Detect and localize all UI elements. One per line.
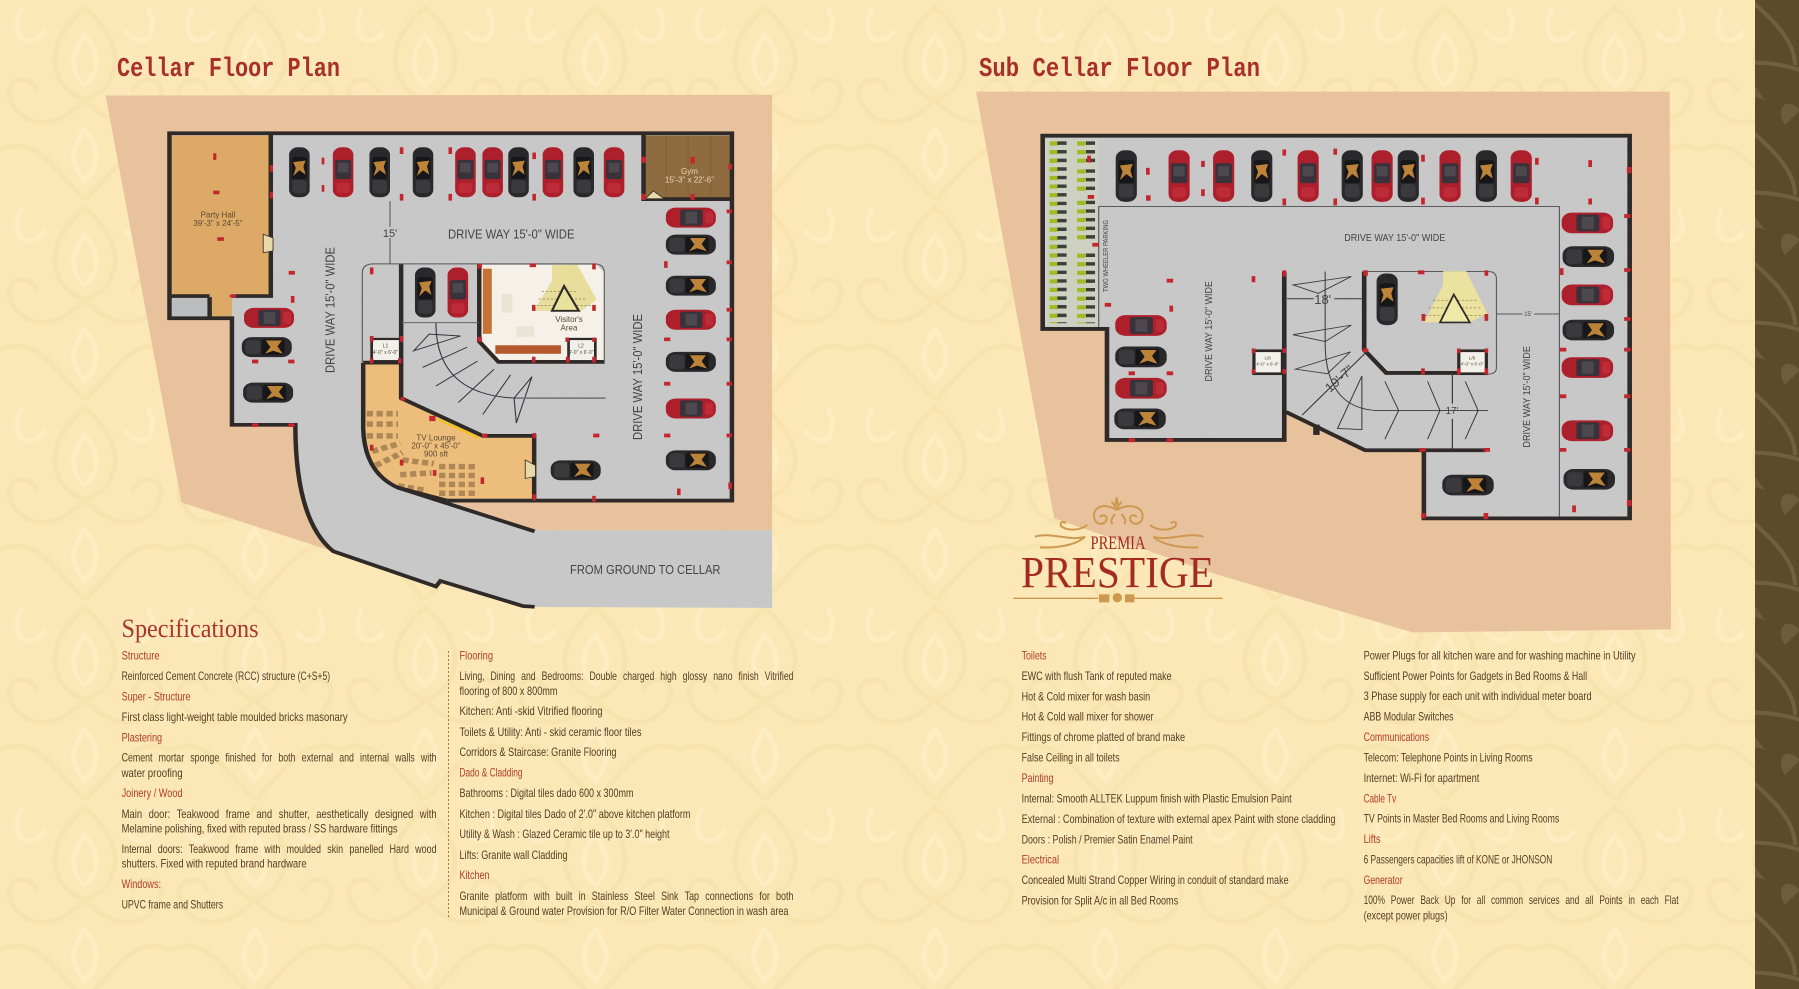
label: drive way top: DRIVE WAY 15'-0" WIDE xyxy=(448,226,575,242)
text block: specifications column 3: Painting xyxy=(1022,771,1054,785)
parking floor xyxy=(1043,136,1630,518)
text block: specifications column 4: Cable Tv xyxy=(1364,791,1396,805)
label: lift left: 4'-0" x 6'-0" xyxy=(1256,362,1279,366)
label: drive way left: DRIVE WAY 15'-0" WIDE xyxy=(322,247,338,373)
label: lift 2: L2 xyxy=(578,344,584,350)
text block: specifications column 1: Super - Structure xyxy=(122,690,191,704)
title: Sub Cellar Floor Plan: Sub Cellar Floor Plan xyxy=(979,55,1260,85)
red pillars xyxy=(1087,149,1631,519)
lift boxes xyxy=(1254,351,1486,374)
dimension 15 ft line xyxy=(389,201,391,264)
text block: specifications column 1: Cement mortar sponge finished for both external and internal walls with xyxy=(122,750,437,764)
text block: specifications column 2: Kitchen xyxy=(460,868,490,882)
text block: specifications column 2: Lifts: Granite wall Cladding xyxy=(460,848,568,862)
text block: specifications column 1: Joinery / Wood xyxy=(122,786,183,800)
label: ramp: FROM GROUND TO CELLAR xyxy=(570,562,720,577)
text block: specifications column 4: Sufficient Power Points for Gadgets in Bed Rooms & Hall xyxy=(1364,669,1587,683)
visitor furniture xyxy=(483,269,561,354)
label: lift 2: 4'-0" x 6'-0" xyxy=(568,350,594,356)
text block: specifications column 4: Power Plugs for all kitchen ware and for washing machine in Utility xyxy=(1364,648,1636,662)
text block: specifications column 3: Internal: Smooth ALLTEK Luppum finish with Plastic Emulsion Paint xyxy=(1022,791,1292,805)
text block: specifications column 3 xyxy=(1022,648,1336,907)
text block: specifications column 3: Toilets xyxy=(1022,648,1047,662)
text block: specifications column 4: Communications xyxy=(1364,730,1429,744)
dimension: 18 ft: 18' xyxy=(1314,292,1331,307)
label: visitor's area: Visitor's xyxy=(555,315,583,324)
logo word: Premia: PREMIA xyxy=(1090,533,1146,554)
label: drive way top: DRIVE WAY 15'-0" WIDE xyxy=(1344,232,1445,244)
site boundary xyxy=(976,92,1671,632)
label: 15 ft: 15' xyxy=(383,228,397,240)
text block: specifications column 4: Telecom: Telephone Points in Living Rooms xyxy=(1364,750,1533,764)
label: party hall: Party Hall xyxy=(201,210,235,220)
text block: specifications column 4: Internet: Wi-Fi for apartment xyxy=(1364,771,1480,785)
text block: specifications column 2: Municipal & Ground water Provision for R/O Filter Water Connection in wash area xyxy=(460,904,789,918)
text block: specifications column 2: flooring of 800 x 800mm xyxy=(460,684,558,698)
staircase xyxy=(1424,271,1487,322)
heading: Specifications: Specifications xyxy=(122,614,258,643)
sub cellar plan geometry xyxy=(976,92,1671,632)
text block: specifications column 1: Internal doors: Teakwood frame with moulded skin panelled Hard wood xyxy=(122,842,437,856)
ramp guide lines xyxy=(414,323,606,423)
text block: specifications column 4: Generator xyxy=(1364,873,1403,887)
text block: specifications column 1: Structure xyxy=(122,648,160,662)
label: drive way right: DRIVE WAY 15'-0" WIDE xyxy=(1521,346,1533,448)
site boundary xyxy=(106,95,772,551)
walls xyxy=(1043,136,1630,518)
party hall room xyxy=(171,135,271,317)
text block: specifications column 1: Windows: xyxy=(122,877,161,891)
logo ornament xyxy=(1013,497,1223,601)
text block: specifications column 3: EWC with flush Tank of reputed make xyxy=(1022,669,1172,683)
title: Cellar Floor Plan: Cellar Floor Plan xyxy=(117,55,340,85)
text block: specifications column 4 xyxy=(1364,648,1679,922)
text block: specifications column 2: Kitchen : Digital tiles Dado of 2'.0" above kitchen platform xyxy=(460,807,690,821)
side band: brown damask strip xyxy=(1755,0,1799,989)
text block: specifications column 3: External : Combination of texture with external apex Paint with stone cladding xyxy=(1022,812,1336,826)
label: lift 1: 4'-0" x 6'-0" xyxy=(373,350,398,356)
label: drive way right: DRIVE WAY 15'-0" WIDE xyxy=(630,314,645,440)
dimension: 17 ft: 17' xyxy=(1445,406,1459,417)
thin block outline xyxy=(362,264,604,364)
panel: sub cellar floor plan xyxy=(976,92,1671,632)
text block: specifications column 1: First class light-weight table moulded bricks masonary xyxy=(122,710,348,724)
label: tv lounge: 900 sft xyxy=(424,450,449,458)
text block: specifications column 4: 3 Phase supply for each unit with individual meter board xyxy=(1364,689,1592,703)
text block: specifications column 4: Lifts xyxy=(1364,832,1381,846)
label: lift 1: L1 xyxy=(383,344,388,350)
text block: specifications column 3: Concealed Multi Strand Copper Wiring in conduit of standard make xyxy=(1022,873,1289,887)
tv lounge room xyxy=(365,364,534,499)
label: lift left: L/8 xyxy=(1264,356,1271,360)
parked cars xyxy=(242,147,716,480)
label: lift right: 4'-0" x 6'-0" xyxy=(1461,362,1484,366)
text block: specifications column 4: ABB Modular Switches xyxy=(1364,709,1454,723)
text block: specifications column 3: Hot & Cold mixer for wash basin xyxy=(1022,689,1150,703)
text block: specifications column 3: Fittings of chrome platted of brand make xyxy=(1022,730,1185,744)
text block: specifications column 1 xyxy=(121,648,437,912)
thin driveway outline xyxy=(1099,206,1559,516)
store room xyxy=(171,297,209,316)
text block: specifications column 1: Reinforced Cement Concrete (RCC) structure (C+S+5) xyxy=(122,669,330,683)
yellow glass line xyxy=(438,419,478,438)
text block: specifications column 2 xyxy=(460,648,794,918)
text block: specifications column 1: Melamine polishing, fixed with reputed brass / SS hardware fittings xyxy=(122,822,398,836)
text block: specifications column 1: UPVC frame and Shutters xyxy=(122,898,223,912)
text block: specifications column 1: Plastering xyxy=(122,730,162,744)
lift boxes xyxy=(372,339,595,361)
visitor's area room xyxy=(481,265,604,361)
text block: specifications column 3: False Ceiling in all toilets xyxy=(1022,750,1120,764)
label: drive way left: DRIVE WAY 15'-0" WIDE xyxy=(1203,281,1215,382)
lounge seating xyxy=(367,414,477,493)
label: tv lounge: 20'-0" x 45'-0" xyxy=(411,442,461,450)
ramp guide lines xyxy=(1287,272,1488,449)
label: gym: 15'-3" x 22'-6" xyxy=(665,176,714,184)
walls xyxy=(169,133,732,607)
label: visitor's area: Area xyxy=(561,324,578,332)
logo word: Prestige: PRESTIGE xyxy=(1021,548,1214,597)
door swings xyxy=(263,191,664,478)
cellar plan geometry xyxy=(106,95,772,608)
text block: specifications column 3: Hot & Cold wall mixer for shower xyxy=(1022,709,1154,723)
two wheeler bays xyxy=(1045,139,1099,326)
text block: specifications column 1: Main door: Teakwood frame and shutter, aesthetically designed with xyxy=(122,807,437,821)
text block: specifications column 2: Granite platform with built in Stainless Steel Sink Tap connections for both xyxy=(460,889,794,903)
text block: specifications column 2: Corridors & Staircase: Granite Flooring xyxy=(460,745,616,759)
text block: specifications column 2: Dado & Cladding xyxy=(460,766,522,780)
label: gym: Gym xyxy=(681,167,698,176)
parked cars xyxy=(1114,150,1615,495)
label: party hall: 39'-3" x 24'-5" xyxy=(193,219,243,228)
red pillars xyxy=(213,147,732,502)
gym room xyxy=(644,135,730,198)
text block: specifications column 1: shutters. Fixed with reputed brand hardware xyxy=(122,856,307,870)
logo: Premia Prestige xyxy=(1013,497,1223,601)
label: tv lounge: TV Lounge xyxy=(416,434,456,442)
text block: specifications column 3: Electrical xyxy=(1022,853,1059,867)
text block: specifications column 4: (except power plugs) xyxy=(1364,908,1448,922)
text block: specifications column 1: water proofing xyxy=(121,766,183,780)
label: lift right: L/8 xyxy=(1469,356,1475,360)
dimension: 15 ft: 15' xyxy=(1524,312,1532,318)
text block: specifications column 2: Bathrooms : Digital tiles dado 600 x 300mm xyxy=(460,786,634,800)
text block: specifications column 2: Kitchen: Anti -skid Vitrified flooring xyxy=(460,704,602,718)
label: two wheeler parking: TWO WHEELER PARKING xyxy=(1101,220,1110,292)
text block: specifications column 3: Provision for Split A/c in all Bed Rooms xyxy=(1022,893,1178,907)
staircase xyxy=(534,265,597,311)
text block: specifications column 2: Flooring xyxy=(460,648,493,662)
text block: specifications column 4: TV Points in Master Bed Rooms and Living Rooms xyxy=(1364,812,1559,826)
column divider xyxy=(448,651,450,918)
dimension: 19 ft 7 in: 19'-7" xyxy=(1322,362,1357,395)
text block: specifications column 2: Toilets & Utility: Anti - skid ceramic floor tiles xyxy=(460,725,642,739)
text block: specifications column 2: Living, Dining and Bedrooms: Double charged high glossy nano finish Vitrified xyxy=(460,669,794,683)
text block: specifications column 3: Doors : Polish / Premier Satin Enamel Paint xyxy=(1022,832,1193,846)
text block: specifications column 4: 6 Passengers capacities lift of KONE or JHONSON xyxy=(1364,852,1552,866)
parking floor and ramp xyxy=(169,133,772,608)
text block: specifications column 2: Utility & Wash : Glazed Ceramic tile up to 3'.0" height xyxy=(460,827,670,841)
panel: cellar floor plan xyxy=(106,95,772,608)
